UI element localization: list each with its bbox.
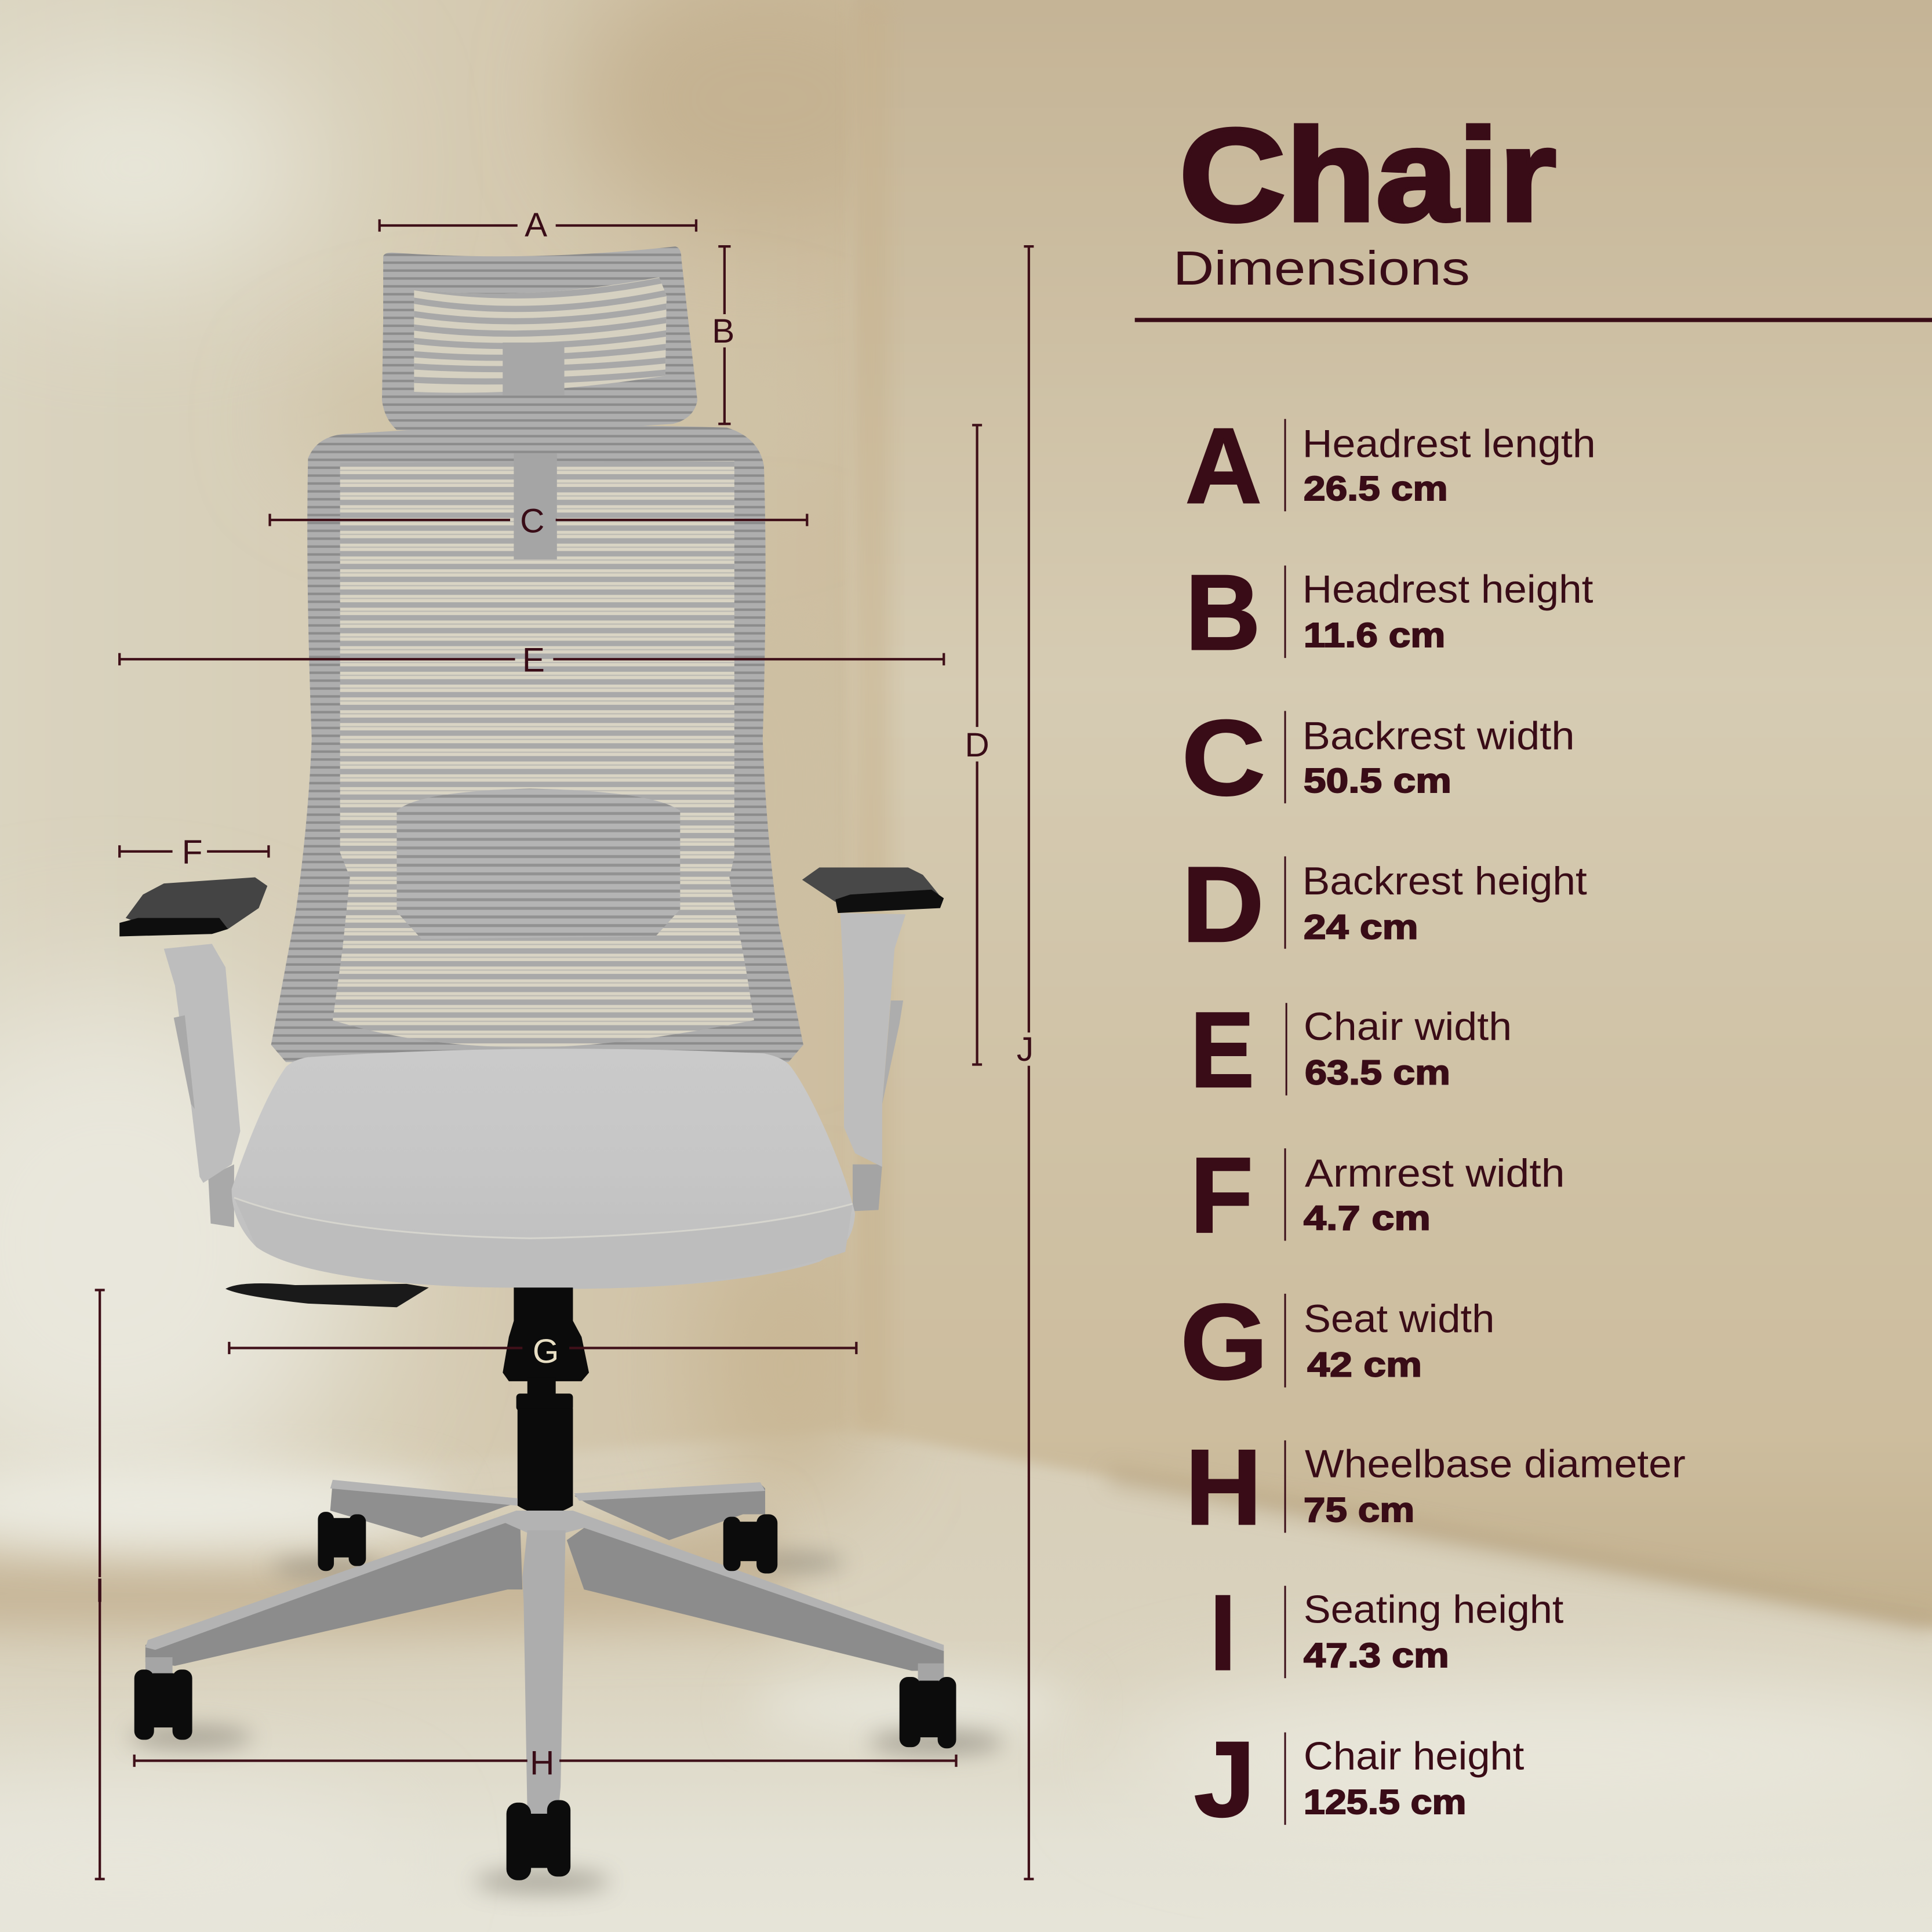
right wall [850, 0, 1932, 1657]
spec row G: Seat width [1304, 1297, 1494, 1341]
seat cushion [232, 1049, 855, 1289]
dimension A [380, 206, 696, 244]
spec row F: F [1190, 1136, 1253, 1256]
spec row J [1194, 1720, 1525, 1839]
spec row E: E [1190, 991, 1254, 1110]
spec row H: H [1185, 1428, 1262, 1547]
casters [134, 1512, 956, 1880]
dimension B: B [712, 312, 734, 350]
spec row E: Chair width [1304, 1005, 1512, 1049]
dimension A: A [525, 206, 547, 244]
dimension C [270, 502, 807, 540]
spec row G [1180, 1283, 1494, 1402]
spec row I: I [1210, 1573, 1236, 1693]
dimension E [119, 641, 944, 679]
spec row I: 47.3 cm [1304, 1636, 1449, 1675]
spec row F: 4.7 cm [1304, 1198, 1431, 1237]
spec row B: Headrest height [1302, 567, 1593, 611]
right floor light [1121, 1682, 1932, 1830]
spec row B: B [1185, 553, 1261, 672]
dimension F: F [182, 834, 202, 871]
dimension J: J [1017, 1031, 1034, 1068]
spec row A: Headrest length [1302, 422, 1596, 466]
title: Chair [1179, 101, 1556, 249]
tilt lever [225, 1283, 429, 1307]
left floor band [0, 1509, 788, 1632]
dimension B [712, 246, 734, 424]
dimension G [229, 1333, 856, 1370]
star base [145, 1480, 944, 1814]
spec row C: Backrest width [1302, 714, 1575, 758]
spec row A: A [1185, 406, 1262, 526]
spec row D [1181, 845, 1587, 965]
dimension D: D [965, 726, 989, 764]
lumbar support [396, 788, 680, 939]
headrest [382, 246, 697, 431]
backrest mesh [271, 425, 803, 1062]
dimension F [119, 834, 268, 871]
right armrest [802, 867, 944, 1211]
dimension J [1017, 246, 1034, 1879]
dimension H [134, 1744, 956, 1782]
spec row E: 63.5 cm [1305, 1053, 1450, 1092]
spec row B [1185, 553, 1593, 672]
spec row C: C [1181, 698, 1265, 818]
spec row A: 26.5 cm [1304, 469, 1448, 508]
spec row E [1190, 991, 1512, 1110]
spec row F: Armrest width [1305, 1151, 1565, 1195]
spec row G: G [1180, 1283, 1268, 1402]
dimension E: E [522, 641, 545, 679]
left armrest [119, 877, 267, 1227]
spec row D: 24 cm [1304, 908, 1418, 947]
title [1173, 101, 1556, 295]
gas lift column [503, 1287, 589, 1514]
spec row I: Seating height [1304, 1587, 1564, 1631]
dimension D [965, 425, 989, 1065]
title rule [1135, 318, 1932, 322]
chair illustration [119, 246, 956, 1880]
spec row J: 125.5 cm [1304, 1782, 1467, 1821]
dimension C: C [520, 502, 544, 540]
floor shadows [129, 1553, 1004, 1893]
dimension I: I [95, 1571, 104, 1609]
spec row B: 11.6 cm [1304, 616, 1445, 654]
spec row H: 75 cm [1304, 1490, 1414, 1529]
dimension I [95, 1290, 105, 1879]
dimension G: G [533, 1333, 559, 1370]
spec row G: 42 cm [1307, 1345, 1422, 1384]
spec row J: Chair height [1304, 1734, 1525, 1778]
spec row H: Wheelbase diameter [1305, 1442, 1686, 1486]
spec row J: J [1194, 1720, 1256, 1839]
corner shading [853, 0, 890, 1429]
dimension H: H [530, 1744, 554, 1782]
spec row A [1185, 406, 1596, 526]
title: Dimensions [1173, 241, 1470, 295]
spec row C [1181, 698, 1575, 818]
caster necks [145, 1657, 173, 1675]
spec row D: D [1181, 845, 1264, 965]
spec row H [1185, 1428, 1686, 1547]
spec row I [1210, 1573, 1564, 1693]
spec row C: 50.5 cm [1304, 761, 1451, 800]
spec row F [1190, 1136, 1565, 1256]
spec row D: Backrest height [1302, 859, 1587, 903]
